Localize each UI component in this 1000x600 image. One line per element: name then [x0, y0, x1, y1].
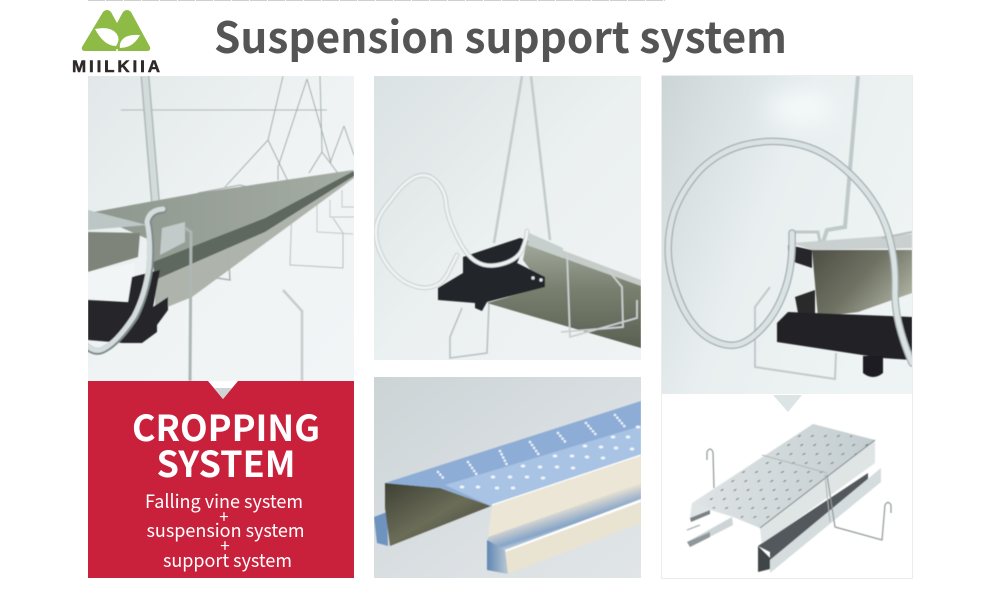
- left foot: [374, 512, 388, 546]
- lower lip: [770, 468, 881, 573]
- panel: gutter end with black bracket: [374, 76, 641, 360]
- lower black tray: [777, 312, 912, 360]
- vine loop: [668, 141, 912, 363]
- clamp plate: [160, 222, 185, 255]
- lower hook: [450, 303, 489, 358]
- panel: perforated blue channel: [374, 377, 641, 578]
- left hook: [707, 449, 714, 488]
- dark channel: [758, 473, 868, 560]
- gutter inner: [88, 232, 140, 272]
- notch: [773, 395, 802, 412]
- side: [760, 440, 875, 545]
- callout text: Falling vine system: [145, 488, 303, 514]
- left rails: [690, 510, 710, 522]
- gutter clamp: [528, 233, 564, 250]
- callout text: suspension system: [146, 517, 304, 543]
- post: [863, 356, 883, 377]
- right hook: [827, 475, 891, 540]
- callout text: support system: [163, 547, 292, 573]
- falling vine tube: [86, 209, 163, 351]
- lower lip: [505, 502, 641, 574]
- vine loop: [376, 175, 527, 288]
- hanger wires: [494, 76, 550, 243]
- channel top: [385, 401, 641, 506]
- clip hook: [792, 232, 820, 242]
- right foot: [487, 540, 508, 574]
- gutter body: [487, 240, 641, 348]
- plate: [692, 424, 875, 528]
- gutter body: [812, 250, 912, 317]
- front hole pattern: [460, 426, 640, 490]
- upper black tray: [788, 245, 812, 268]
- callout text: +: [220, 532, 230, 557]
- black tray: [88, 270, 168, 343]
- callout text: [145, 488, 304, 573]
- cream side: [488, 455, 641, 538]
- gutter top surface: [88, 170, 353, 263]
- logo: Miilkiia: MIILKIIA: [72, 57, 160, 76]
- dark rounded band: [153, 171, 354, 280]
- panel: loop close-up and channel cut-out: [662, 76, 912, 578]
- gutter side: [155, 176, 354, 312]
- long hook: [185, 228, 191, 381]
- blue band: [488, 483, 641, 551]
- logo: Miilkiia: [72, 10, 160, 76]
- foot: [758, 546, 770, 572]
- hanger rod: [145, 76, 156, 208]
- channel cut-out: [687, 424, 891, 573]
- callout heading: CROPPING: [132, 400, 320, 452]
- back hole clusters: [438, 415, 625, 479]
- title: Suspension support system: [214, 4, 787, 66]
- top plate: [792, 234, 912, 250]
- wire hooks: [561, 253, 637, 337]
- wire hook: [755, 287, 836, 379]
- silver top plate: [88, 210, 147, 230]
- black bracket: [438, 238, 545, 311]
- background wires: [121, 76, 354, 268]
- panel: cropping system callout: [88, 381, 354, 578]
- channel inner: [385, 483, 491, 546]
- panel: long gutter photo: [86, 76, 354, 381]
- small hook: [217, 269, 232, 282]
- panel: cropping system callout: SYSTEM: [156, 436, 296, 488]
- inner black step: [795, 290, 815, 315]
- rod: [823, 76, 858, 242]
- plate underside: [690, 503, 733, 518]
- callout text: +: [219, 503, 229, 528]
- bottom hook: [283, 290, 302, 381]
